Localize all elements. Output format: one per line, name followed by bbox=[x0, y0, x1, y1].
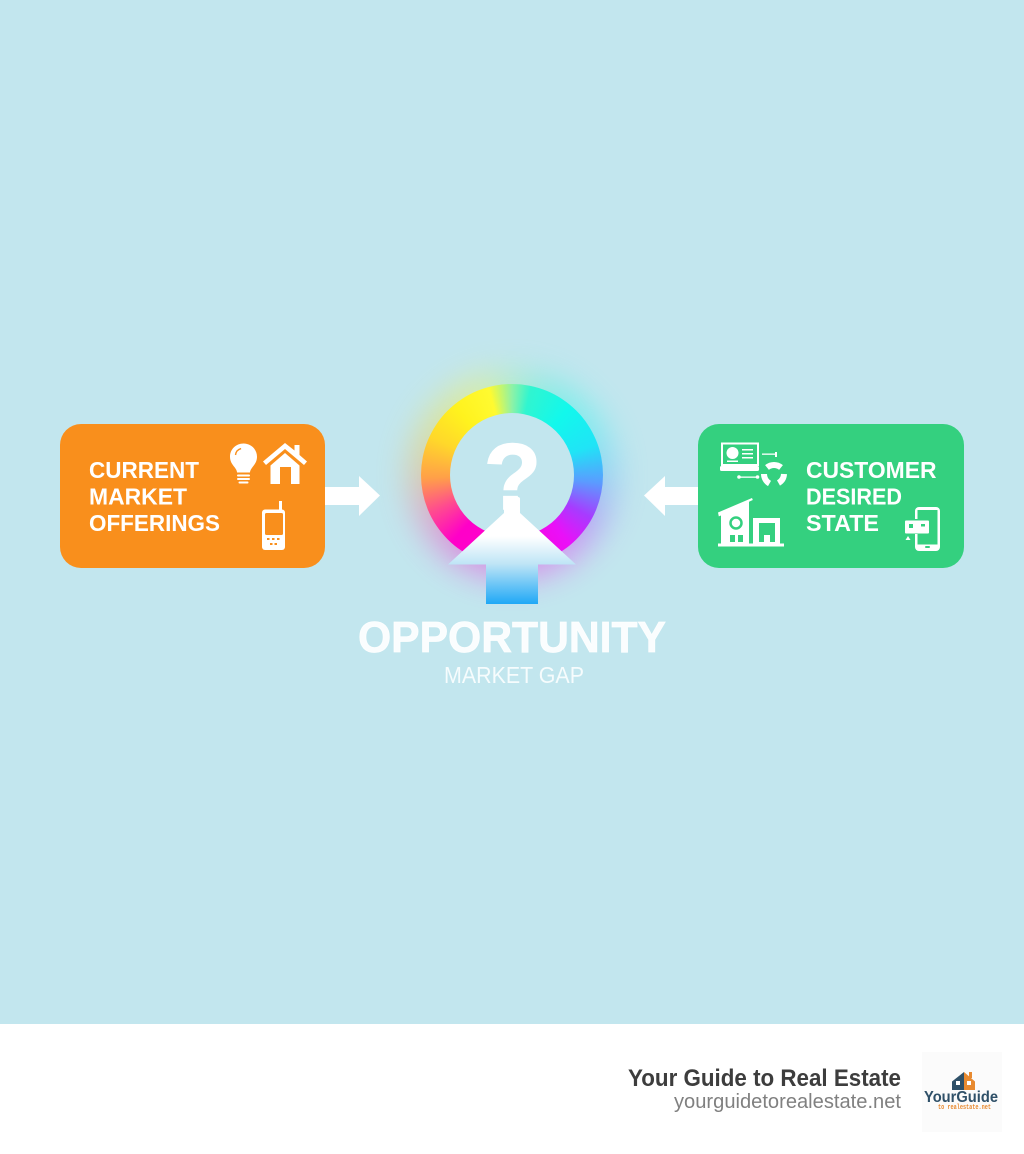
icon: house bbox=[263, 443, 307, 484]
heading: customer desired state: CUSTOMER bbox=[806, 457, 937, 483]
arrow: left into ring bbox=[644, 476, 698, 516]
panel: customer desired state bbox=[698, 424, 964, 568]
icon: smartphone with card bbox=[904, 507, 940, 551]
heading: current market offerings: OFFERINGS bbox=[89, 510, 220, 536]
ring centre bbox=[450, 413, 574, 537]
icon: laptop with recycle symbol bbox=[720, 442, 784, 484]
icon: mobile phone bbox=[262, 501, 285, 550]
icon: factory building bbox=[718, 498, 784, 546]
rainbow ring bbox=[421, 384, 603, 566]
question mark: ? bbox=[484, 424, 541, 529]
heading: customer desired state: STATE bbox=[806, 510, 879, 536]
logo wordmark: YourGuide bbox=[924, 1089, 998, 1106]
logo bbox=[922, 1052, 1002, 1132]
icon: light bulb bbox=[230, 444, 257, 484]
panel: current market offerings bbox=[60, 424, 325, 568]
arrow: right into ring bbox=[325, 476, 380, 516]
footer url: yourguidetorealestate.net bbox=[674, 1090, 901, 1113]
logo tagline: to realestate.net bbox=[938, 1104, 991, 1112]
arrow: upward gradient bbox=[448, 497, 576, 604]
heading: customer desired state bbox=[806, 457, 937, 536]
heading: opportunity: OPPORTUNITY bbox=[358, 613, 666, 662]
subheading: market gap: MARKET GAP bbox=[444, 662, 584, 688]
heading: current market offerings: MARKET bbox=[89, 484, 188, 510]
logo house bbox=[952, 1072, 975, 1090]
heading: current market offerings bbox=[89, 457, 220, 536]
footer brand name: Your Guide to Real Estate bbox=[628, 1065, 901, 1092]
heading: current market offerings: CURRENT bbox=[89, 457, 200, 483]
footer band bbox=[0, 1024, 1024, 1154]
glow behind ring bbox=[408, 371, 616, 579]
heading: customer desired state: DESIRED bbox=[806, 484, 902, 510]
